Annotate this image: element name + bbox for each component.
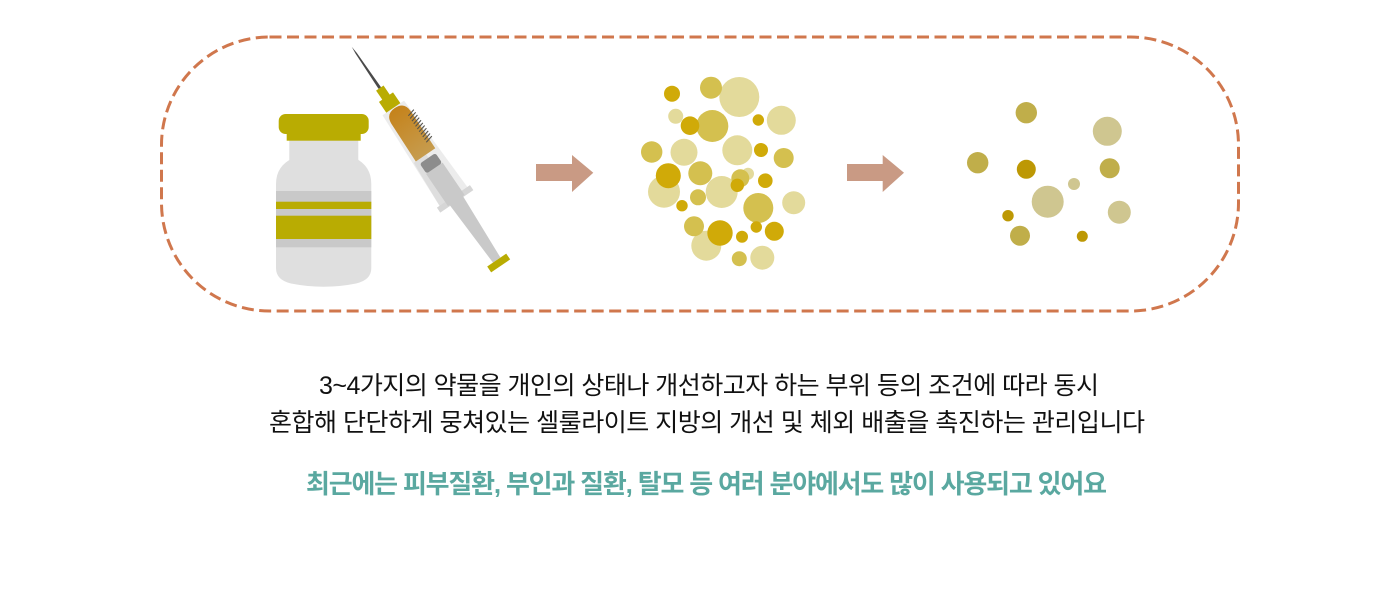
text block: description: 3~4가지의 약물을 개인의 상태나 개선하고자 하는 부위 등의 조건에 따라 동시 bbox=[319, 372, 1099, 400]
panel: dashed process frame bbox=[162, 37, 1238, 311]
chart: reduced fat cell cluster bbox=[967, 102, 1131, 246]
text block: description: 혼합해 단단하게 뭉쳐있는 셀룰라이트 지방의 개선 및 체외 배출을 촉진하는 관리입니다 bbox=[269, 409, 1145, 437]
icon: medicine vial bbox=[276, 114, 371, 287]
icon: syringe bbox=[335, 35, 517, 277]
arrow: first step bbox=[536, 155, 593, 192]
arrow: second step bbox=[847, 155, 904, 192]
heading: teal highlight: 최근에는 피부질환, 부인과 질환, 탈모 등 여러 분야에서도 많이 사용되고 있어요 bbox=[306, 469, 1107, 499]
chart: dense fat cell cluster bbox=[641, 77, 805, 270]
text block: description bbox=[269, 372, 1145, 437]
